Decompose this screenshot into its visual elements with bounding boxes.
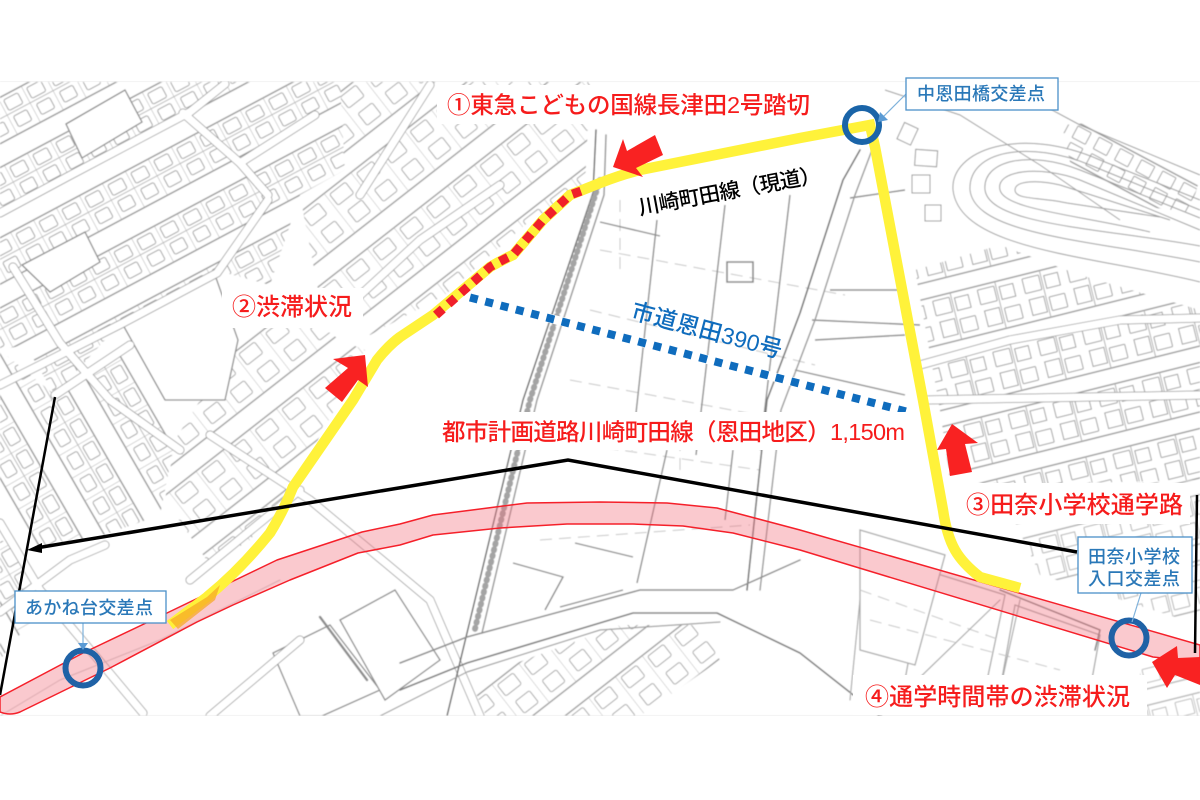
base map <box>0 81 1200 716</box>
city road 390: white base <box>472 298 912 413</box>
callout: あかね台交差点: あかね台交差点 <box>25 598 153 618</box>
intersection circle: あかね台 <box>66 650 100 686</box>
label: planned road: 都市計画道路川崎町田線（恩田地区）1,150m <box>442 419 905 445</box>
roads <box>0 84 1200 716</box>
callout: 田奈小学校入口交差点 <box>1078 537 1192 622</box>
overlap of band on road <box>170 585 220 629</box>
label 4 <box>853 675 1147 715</box>
red arrow 1 <box>613 135 663 177</box>
label: city road 390: 市道恩田390号 <box>629 298 785 363</box>
blue dashed line <box>470 298 912 413</box>
contours <box>885 82 1200 282</box>
label 4: ④通学時間帯の渋滞状況 <box>865 684 1130 711</box>
railway crossing section: red dashes <box>436 190 584 315</box>
label 3 <box>957 483 1190 524</box>
hill houses <box>897 122 941 221</box>
rail and river <box>447 130 596 716</box>
red arrow 4 <box>1152 646 1200 688</box>
existing road: yellow <box>170 125 1020 625</box>
label 1: ①東急こどもの国線長津田2号踏切 <box>447 92 810 118</box>
label 2: ②渋滞状況 <box>232 294 352 321</box>
planned road band <box>0 502 1200 714</box>
label 1 <box>437 85 815 124</box>
red arrow 2 <box>325 355 368 402</box>
callout: 中恩田橋交差点: 中恩田橋交差点 <box>917 84 1045 104</box>
intersection circle: 中恩田橋 <box>845 108 879 142</box>
map edges <box>0 81 1200 716</box>
label: planned road <box>438 412 912 450</box>
callout: 田奈小学校入口交差点: 田奈小学校 <box>1088 547 1180 567</box>
black leader lines <box>0 397 1197 695</box>
label: existing road: 川崎町田線（現道） <box>637 164 823 220</box>
callout: 田奈小学校入口交差点: 入口交差点 <box>1088 569 1180 589</box>
label 2 <box>222 288 363 328</box>
label 3: ③田奈小学校通学路 <box>966 492 1183 519</box>
callout: あかね台交差点 <box>15 591 166 650</box>
red arrow 3 <box>937 424 978 476</box>
intersection circle: 田奈小学校入口 <box>1112 620 1146 656</box>
callout: 中恩田橋交差点 <box>878 78 1058 122</box>
field lines <box>540 200 1060 670</box>
white plots <box>22 90 1100 716</box>
